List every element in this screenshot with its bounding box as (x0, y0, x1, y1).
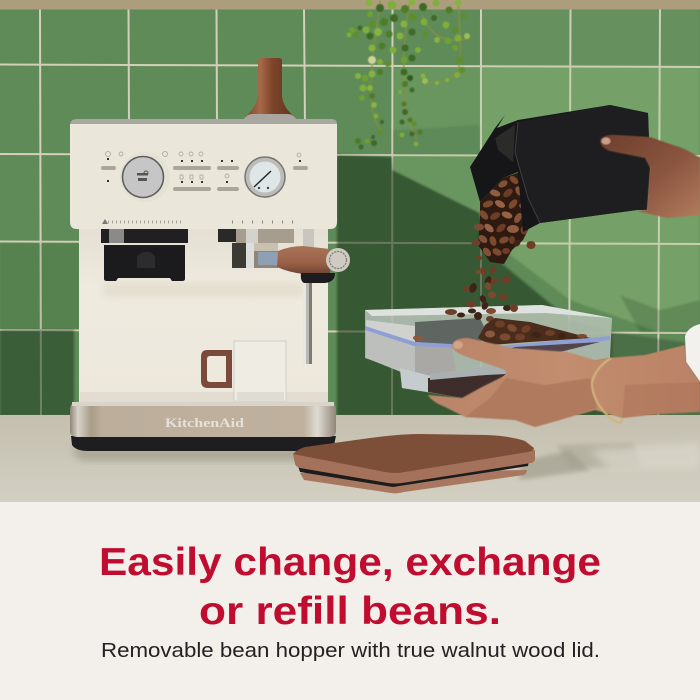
buttons (101, 166, 308, 191)
machine body (79, 226, 328, 404)
tick scale (108, 220, 184, 224)
beans in hopper (478, 318, 590, 345)
brew head and portafilter (218, 229, 350, 274)
hopper mount (101, 229, 188, 281)
wood lid (293, 434, 535, 493)
bean hopper (365, 305, 612, 398)
hopper rim (365, 326, 456, 348)
hopper dark interior (415, 318, 490, 345)
bracelet (592, 358, 622, 423)
selector dial (120, 152, 170, 202)
counter top (0, 415, 700, 503)
coffee bag (470, 105, 650, 232)
wood handle (277, 246, 330, 274)
hopper back wall (365, 305, 612, 398)
headline: or refill beans. (199, 590, 501, 633)
pressure gauge (245, 157, 285, 197)
wood knob (244, 58, 296, 119)
steam wand (301, 273, 335, 364)
tile wall (0, 0, 700, 416)
light and shadow on wall (0, 10, 700, 416)
top strip (0, 0, 700, 10)
falling beans (526, 241, 536, 249)
sleeve (685, 324, 700, 382)
control panel (70, 119, 337, 229)
caption panel (0, 502, 700, 700)
brand wordmark: KitchenAid (165, 415, 245, 430)
grout lines (0, 9, 700, 416)
indicator dots (107, 158, 301, 183)
machine foot (71, 436, 336, 451)
upper hand (600, 135, 700, 218)
espresso machine (70, 58, 350, 451)
lower hand and arm (428, 338, 700, 427)
headline (99, 541, 601, 633)
stainless base (70, 402, 336, 437)
mound inside bag (478, 172, 532, 264)
headline: Easily change, exchange (99, 541, 601, 584)
coffee beans (413, 172, 590, 345)
glass cup (201, 341, 286, 401)
subheading: Removable bean hopper with true walnut wood lid. (101, 640, 600, 662)
panel icons (106, 152, 301, 179)
plant (346, 0, 470, 150)
